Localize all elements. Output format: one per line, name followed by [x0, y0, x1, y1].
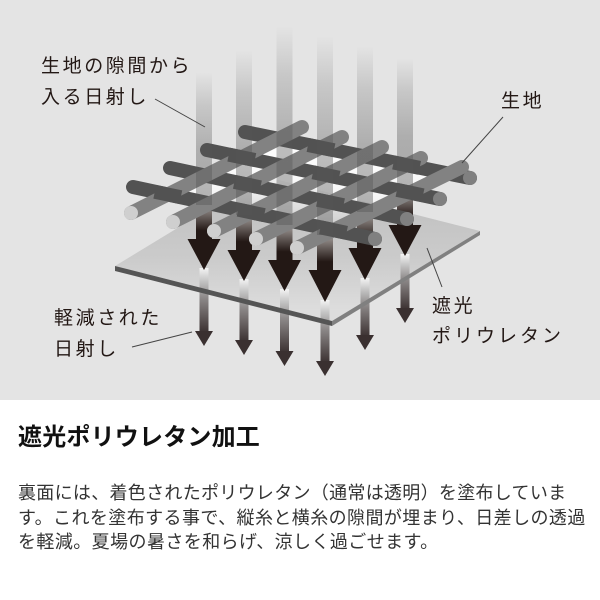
body text [18, 483, 586, 552]
label: fabric: 生地 [501, 90, 544, 112]
background [0, 0, 600, 400]
body text: 裏面には、着色されたポリウレタン（通常は透明）を塗布していま [18, 483, 566, 503]
body text: を軽減。夏場の暑さを和らげ、涼しく過ごせます。 [18, 532, 439, 552]
label: light blocking: 遮光 [432, 295, 475, 317]
label: polyurethane: ポリウレタン [432, 325, 564, 347]
leader lines [132, 99, 503, 347]
label: reduced: 軽減された [54, 307, 162, 329]
light beams passing through the fabric [196, 26, 413, 235]
polyurethane sheet [115, 176, 480, 321]
label: sunlight: 日射し [54, 338, 119, 360]
large arrows above the sheet [188, 190, 422, 302]
sheet edge [115, 231, 480, 326]
woven fabric [124, 127, 477, 255]
downward arrows transmitted below the sheet [195, 254, 414, 376]
label: light entering through fabric gaps: 生地の隙間から [41, 55, 192, 77]
label: light entering, line 2: 入る日射し [41, 86, 149, 108]
diagram panel [0, 0, 600, 400]
body text: す。これを塗布する事で、縦糸と横糸の隙間が埋まり、日差しの透過 [18, 508, 586, 528]
heading: 遮光ポリウレタン加工 [18, 424, 260, 451]
